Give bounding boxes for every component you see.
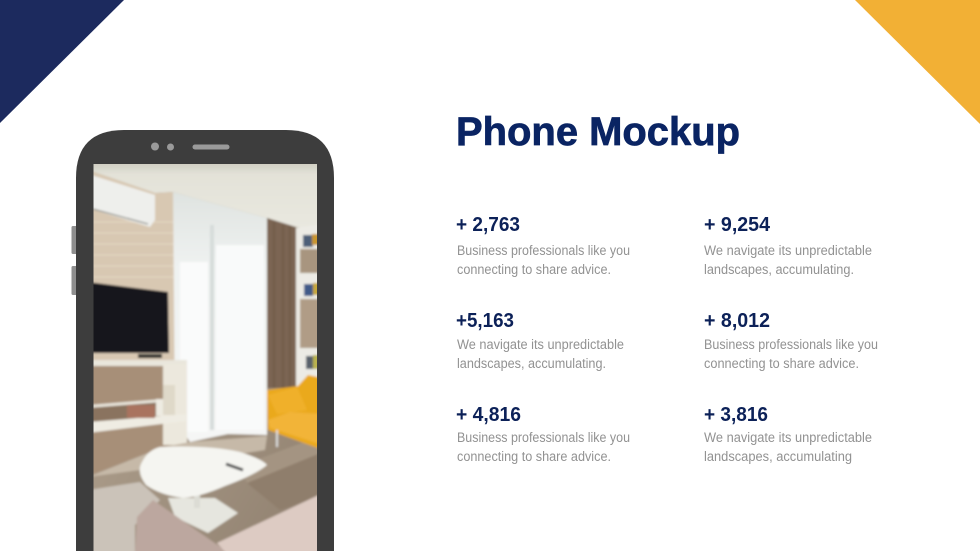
stat: 2,763: Business professionals like you <box>457 243 630 258</box>
phone body <box>76 130 334 551</box>
stat: 4,816: Business professionals like you <box>457 430 630 445</box>
stat: 2,763: + 2,763 <box>456 214 520 236</box>
stat: 9,254: We navigate its unpredictable <box>704 243 872 258</box>
camera and speaker <box>151 142 230 150</box>
stat: 5,163 <box>456 310 624 371</box>
stat: 3,816: We navigate its unpredictable <box>704 430 872 445</box>
stat: 3,816: landscapes, accumulating <box>704 449 852 464</box>
corner triangle: yellow <box>855 0 980 124</box>
stat: 3,816: + 3,816 <box>704 404 768 426</box>
stat: 5,163: We navigate its unpredictable <box>457 337 624 352</box>
stat: 4,816: connecting to share advice. <box>457 449 611 464</box>
phone mockup <box>72 130 334 551</box>
room photo on screen <box>88 160 323 551</box>
stat: 8,012: Business professionals like you <box>704 337 878 352</box>
stat: 2,763 <box>456 214 630 277</box>
stat: 2,763: connecting to share advice. <box>457 262 611 277</box>
stat: 8,012: connecting to share advice. <box>704 356 859 371</box>
corner triangle: navy <box>0 0 124 123</box>
stat: 5,163: landscapes, accumulating. <box>457 356 606 371</box>
stat: 8,012 <box>704 310 878 371</box>
stat: 9,254: landscapes, accumulating. <box>704 262 854 277</box>
stat: 8,012: + 8,012 <box>704 310 770 332</box>
stat: 5,163: +5,163 <box>456 310 514 332</box>
stat: 4,816: + 4,816 <box>456 404 521 426</box>
stat: 4,816 <box>456 404 630 464</box>
stat: 3,816 <box>704 404 872 464</box>
title: Phone Mockup <box>456 110 740 154</box>
side buttons <box>72 226 78 295</box>
stat: 9,254 <box>704 214 872 277</box>
stat: 9,254: + 9,254 <box>704 214 771 236</box>
